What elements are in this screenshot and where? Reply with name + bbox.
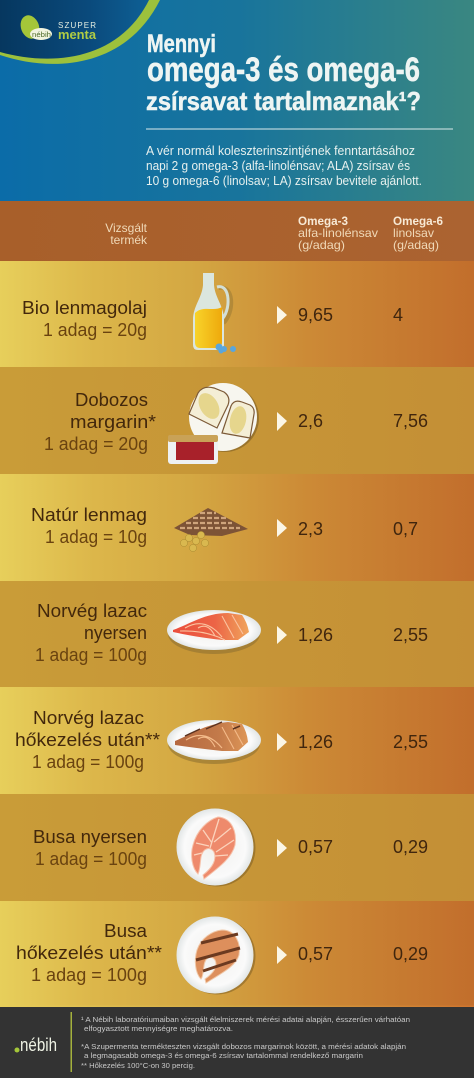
row: Bio lenmagolaj [0, 261, 474, 367]
table header: termék [110, 233, 148, 247]
intro text: napi 2 g omega-3 (alfa-linolénsav; ALA) zsírsav és [146, 159, 410, 173]
row: Natúr lenmag [0, 474, 474, 581]
row: Busa hőkezelés után: hőkezelés után** [16, 943, 162, 963]
omega-3 value: 1,26 [298, 625, 333, 645]
arrow [277, 626, 287, 644]
table header: (g/adag) [298, 238, 345, 252]
title: Mennyi [147, 30, 216, 58]
title [146, 30, 421, 116]
logo: Szupermenta [0, 0, 160, 64]
omega-6 value: 0,29 [393, 837, 428, 857]
row: Busa hőkezelés után: Busa [104, 921, 148, 941]
row: Busa hőkezelés után: 1 adag = 100g [31, 965, 147, 985]
footnotes [81, 1015, 410, 1070]
logo: Szupermenta: menta [58, 27, 97, 42]
logo: nébih: nébih [20, 1035, 57, 1055]
row: Dobozos margarin: margarin* [70, 412, 156, 432]
row: Natúr lenmag: Natúr lenmag [31, 505, 147, 525]
intro text: A vér normál koleszterinszintjének fenntartásához [146, 144, 415, 158]
omega-3 value: 0,57 [298, 837, 333, 857]
row: Dobozos margarin: 1 adag = 20g [44, 434, 148, 454]
row: Norvég lazac hőkezelés után [0, 687, 474, 794]
table header: Omega-6 [393, 214, 443, 228]
omega-6 value: 2,55 [393, 625, 428, 645]
footnotes: a legmagasabb omega-3 és omega-6 zsírsav tartalommal rendelkező margarin [84, 1051, 363, 1060]
icon: margarine on bread [168, 383, 259, 464]
omega-6 value: 2,55 [393, 732, 428, 752]
row: Norvég lazac hőkezelés után: hőkezelés után** [15, 730, 160, 750]
arrow [277, 519, 287, 537]
table header: linolsav [393, 226, 434, 240]
row: Bio lenmagolaj: 1 adag = 20g [43, 320, 147, 340]
omega-6 value: 7,56 [393, 411, 428, 431]
row: Busa hőkezelés után [0, 901, 474, 1007]
omega-3 value: 2,6 [298, 411, 323, 431]
icon: cooked salmon on plate [167, 720, 261, 764]
footnotes: elfogyasztott mennyiségre meghatározva. [84, 1024, 233, 1033]
row: Norvég lazac nyersen [0, 581, 474, 687]
footer [0, 1006, 474, 1078]
table header: Vizsgált [105, 221, 148, 235]
arrow [277, 733, 287, 751]
title: zsírsavat tartalmaznak¹? [146, 86, 421, 116]
omega-3 value: 1,26 [298, 732, 333, 752]
omega-6 value: 0,7 [393, 519, 418, 539]
row: Dobozos margarin: Dobozos [75, 390, 148, 410]
omega-3 value: 0,57 [298, 944, 333, 964]
footer accent line [0, 1006, 474, 1007]
row: Dobozos margarin [0, 367, 474, 474]
icon: raw salmon on plate [167, 610, 261, 654]
omega-6 value: 4 [393, 305, 403, 325]
table header: (g/adag) [393, 238, 439, 252]
icon: raw fish steak on plate [176, 808, 256, 886]
arrow [277, 946, 287, 964]
arrow [277, 839, 287, 857]
footnotes: ¹ A Nébih laboratóriumaiban vizsgált élelmiszerek mérési adatai alapján, ésszerűen várhatóan [81, 1015, 410, 1024]
row: Norvég lazac nyersen: nyersen [84, 623, 147, 643]
row: Norvég lazac hőkezelés után: 1 adag = 100g [32, 752, 144, 772]
row: Natúr lenmag: 1 adag = 10g [45, 527, 147, 547]
omega-6 value: 0,29 [393, 944, 428, 964]
title: omega-3 és omega-6 [147, 51, 420, 89]
row: Bio lenmagolaj: Bio lenmagolaj [22, 298, 147, 318]
row: Norvég lazac nyersen: 1 adag = 100g [35, 645, 147, 665]
icon: cooked fish steak on plate [176, 916, 256, 994]
omega-3 value: 9,65 [298, 305, 333, 325]
row: Busa nyersen: 1 adag = 100g [35, 849, 147, 869]
row: Norvég lazac nyersen: Norvég lazac [37, 601, 147, 621]
intro text: 10 g omega-6 (linolsav; LA) zsírsav bevitele ajánlott. [146, 174, 422, 188]
row: Busa nyersen [0, 794, 474, 901]
icon: flax seeds [174, 508, 248, 552]
arrow [277, 306, 287, 324]
row: Busa nyersen: Busa nyersen [33, 827, 147, 847]
header background [0, 0, 474, 201]
arrow [277, 412, 287, 431]
intro text [146, 144, 422, 188]
footnotes: ** Hőkezelés 100°C-on 30 percig. [81, 1061, 195, 1070]
icon: oil bottle [193, 273, 236, 354]
table header: alfa-linolénsav [298, 226, 378, 240]
logo: Szupermenta: SZUPER [58, 21, 96, 30]
logo: Szupermenta: nébih [32, 32, 51, 39]
table header [0, 201, 474, 261]
divider [146, 128, 453, 130]
footnotes: *A Szupermenta termékteszten vizsgált dobozos margarinok között, a mérési adatok alapján [81, 1042, 406, 1051]
table header: Omega-3 [298, 214, 348, 228]
omega-3 value: 2,3 [298, 519, 323, 539]
row: Norvég lazac hőkezelés után: Norvég lazac [33, 708, 144, 728]
